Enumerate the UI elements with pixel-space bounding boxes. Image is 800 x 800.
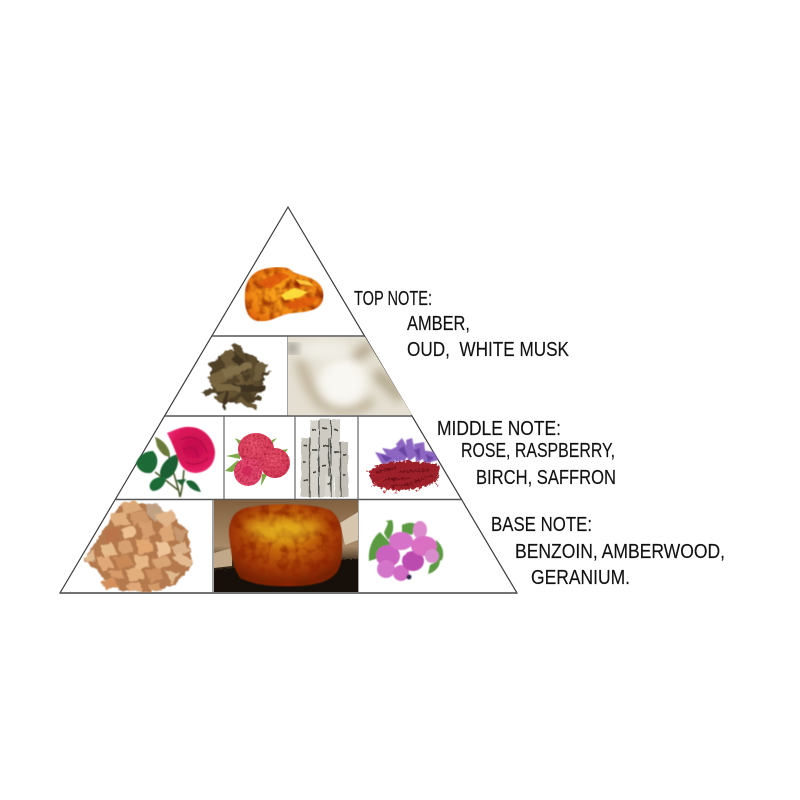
image: white musk (288, 337, 413, 416)
image: rose (136, 427, 215, 497)
label: top note: OUD, WHITE MUSK (407, 338, 569, 361)
image: geranium flower (369, 520, 443, 581)
image: amber stone (top tier) (245, 267, 323, 321)
label: base note: GERANIUM. (531, 566, 630, 589)
label: middle note (437, 417, 616, 489)
label: base note (491, 513, 725, 589)
label: middle note: ROSE, RASPBERRY, (461, 439, 615, 462)
image: saffron (367, 438, 440, 494)
image: benzoin resin chunks (84, 501, 192, 592)
label: top note (354, 287, 569, 361)
image: amber block (214, 500, 360, 592)
image: birch logs (301, 419, 348, 497)
image: oud wood chips (201, 344, 273, 410)
pyramid frame (60, 207, 517, 593)
image: raspberries (225, 433, 290, 486)
label: middle note: BIRCH, SAFFRON (476, 466, 616, 489)
label: top note: AMBER, (407, 312, 470, 335)
label: base note: BENZOIN, AMBERWOOD, (515, 540, 725, 563)
label: middle note: MIDDLE NOTE: (437, 417, 561, 440)
label: base note: BASE NOTE: (491, 513, 592, 536)
label: top note: TOP NOTE: (354, 287, 432, 310)
